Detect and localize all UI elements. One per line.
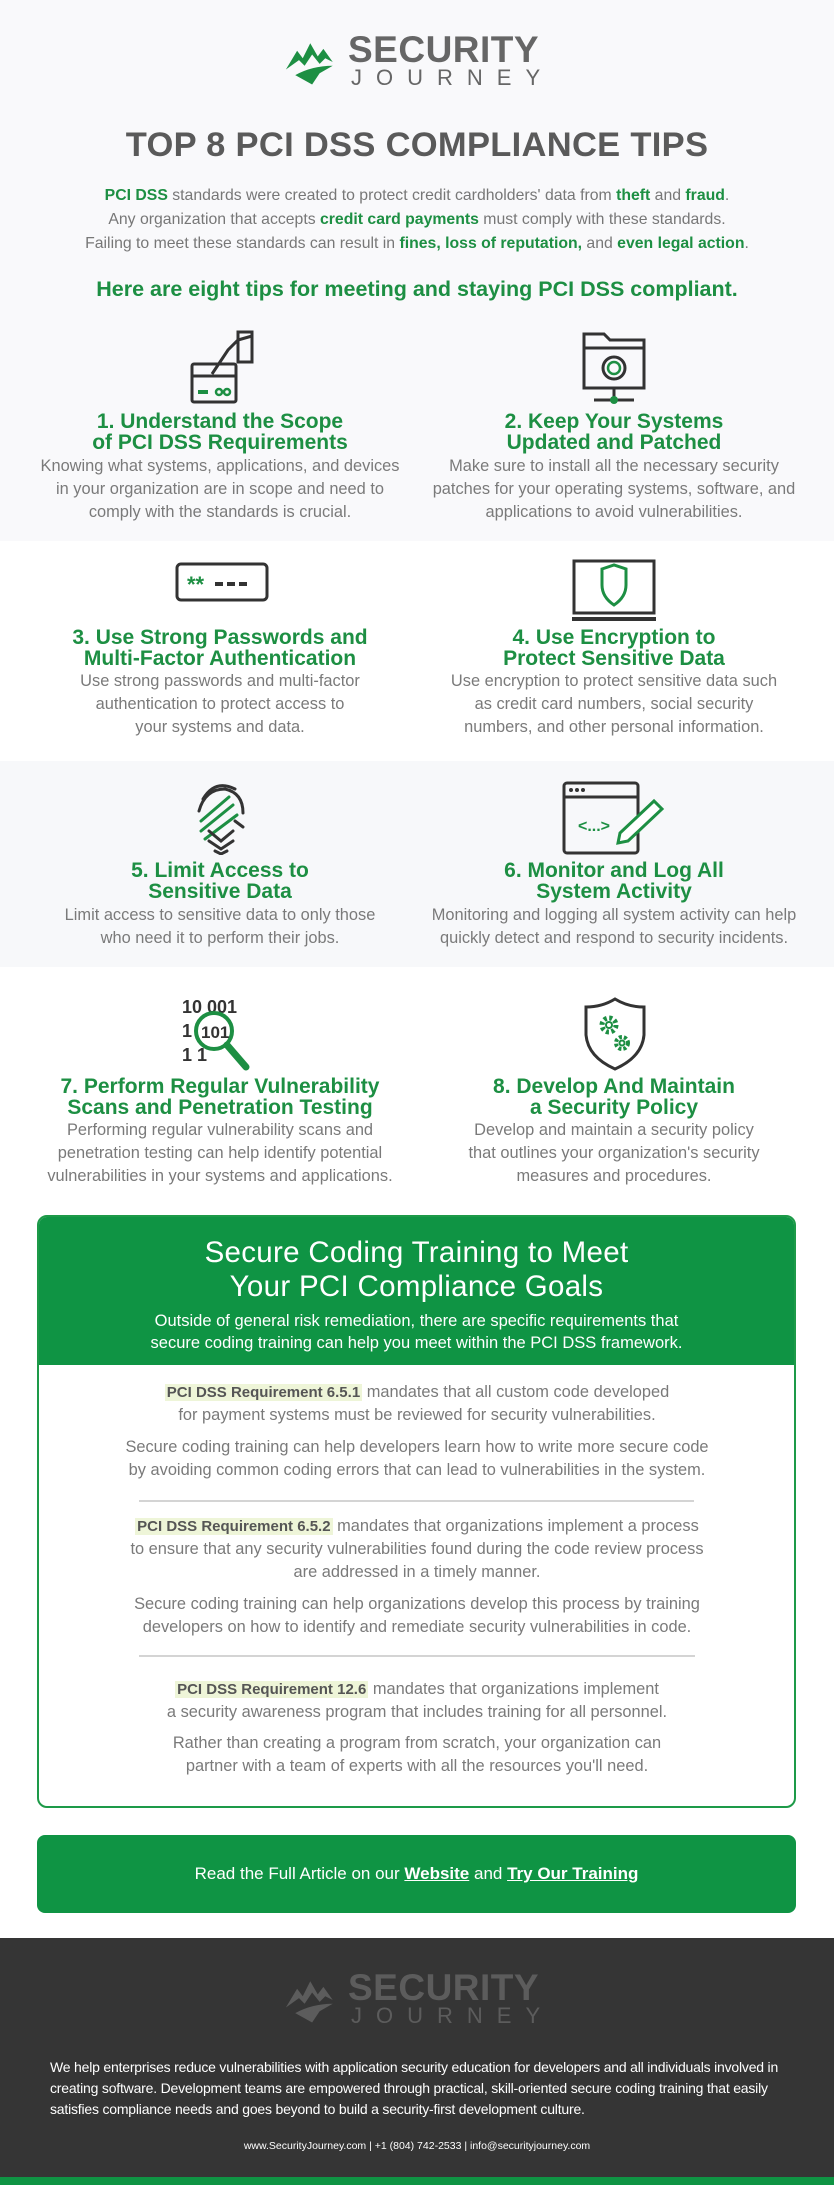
description: penetration testing can help identify potential xyxy=(58,1144,382,1162)
icon: laptop shield xyxy=(572,560,656,621)
heading xyxy=(503,626,725,670)
icon: binary magnifier: 1 0 xyxy=(182,1021,207,1041)
description: Monitoring and logging all system activity can help xyxy=(432,906,796,924)
description xyxy=(41,457,399,521)
footer logo: SECURITY xyxy=(348,1967,539,2008)
heading: 4. Use Encryption to xyxy=(512,626,716,649)
tip 4 xyxy=(451,560,777,736)
requirement 6.5.2: are addressed in a timely manner. xyxy=(294,1563,540,1581)
tip 5 xyxy=(65,784,375,947)
description: numbers, and other personal information. xyxy=(464,718,764,736)
icon: folder update xyxy=(582,332,646,404)
icon: password field: ** xyxy=(187,572,205,597)
text: partner with a team of experts with all the resources you'll need. xyxy=(186,1757,648,1775)
description: that outlines your organization's security xyxy=(468,1144,760,1162)
tip 8 xyxy=(468,997,760,1185)
icon: code window with pencil: <...> xyxy=(578,818,610,835)
description: Make sure to install all the necessary security xyxy=(449,457,779,475)
panel intro xyxy=(151,1312,682,1352)
intro text: Failing to meet these standards can result in fines, loss of reputation, and even legal action. xyxy=(85,235,749,252)
description xyxy=(47,1121,393,1185)
requirement 12.6: PCI DSS Requirement 12.6 mandates that organizations implement xyxy=(177,1680,659,1698)
footer xyxy=(0,1938,834,2185)
description: Use encryption to protect sensitive data such xyxy=(451,672,777,690)
heading xyxy=(505,410,723,454)
text: Secure coding training can help developers learn how to write more secure code xyxy=(125,1438,709,1456)
footer logo: JOURNEY xyxy=(351,2003,554,2028)
call to action button: Read the Full Article on our Website and Try Our Training xyxy=(195,1864,638,1883)
tip 1 xyxy=(41,330,399,521)
description xyxy=(468,1121,760,1185)
requirement 6.5.1: for payment systems must be reviewed for security vulnerabilities. xyxy=(178,1406,656,1424)
description: Performing regular vulnerability scans and xyxy=(67,1121,373,1139)
heading: Scans and Penetration Testing xyxy=(67,1096,373,1119)
footer text: We help enterprises reduce vulnerabilities with application security education for developers and all individuals involved in creating software. Development teams are empowered through practical, skill-oriented secure coding training that easily satisfies compliance needs and goes beyond to build a security-first development culture. xyxy=(50,2059,778,2117)
text: by avoiding common coding errors that can lead to vulnerabilities in the system. xyxy=(129,1461,705,1479)
heading: 2. Keep Your Systems xyxy=(505,410,723,433)
heading: 1. Understand the Scope xyxy=(97,410,343,433)
tip 7 xyxy=(47,997,393,1185)
description xyxy=(80,672,360,736)
title: TOP 8 PCI DSS COMPLIANCE TIPS xyxy=(126,126,708,164)
requirement 6.5.1 xyxy=(165,1383,669,1424)
description: Develop and maintain a security policy xyxy=(474,1121,754,1139)
heading: 6. Monitor and Log All xyxy=(504,859,724,882)
contact line: www.SecurityJourney.com | +1 (804) 742-2533 | info@securityjourney.com xyxy=(244,2140,590,2152)
description: in your organization are in scope and need to xyxy=(56,480,384,498)
text: Rather than creating a program from scratch, your organization can xyxy=(173,1734,661,1752)
panel heading: Secure Coding Training to Meet xyxy=(205,1236,628,1269)
tip 3 xyxy=(72,562,368,736)
logo xyxy=(286,29,554,90)
heading: Multi-Factor Authentication xyxy=(84,647,356,670)
description: Use strong passwords and multi-factor xyxy=(80,672,360,690)
heading: Protect Sensitive Data xyxy=(503,647,725,670)
panel intro: Outside of general risk remediation, there are specific requirements that xyxy=(155,1312,678,1330)
text: developers on how to identify and remediate security vulnerabilities in code. xyxy=(143,1618,691,1636)
panel intro: secure coding training can help you meet within the PCI DSS framework. xyxy=(151,1334,682,1352)
panel heading xyxy=(205,1236,628,1303)
description: vulnerabilities in your systems and applications. xyxy=(47,1167,393,1185)
icon: binary magnifier: 1 1 xyxy=(182,1045,207,1065)
logo: JOURNEY xyxy=(351,65,554,90)
icon: card hand xyxy=(190,330,254,404)
heading xyxy=(131,859,309,903)
requirement 12.6: a security awareness program that includes training for all personnel. xyxy=(167,1703,667,1721)
requirement 6.5.2: to ensure that any security vulnerabilities found during the code review process xyxy=(130,1540,704,1558)
icon: binary magnifier: 10 001 xyxy=(182,997,237,1017)
panel heading: Your PCI Compliance Goals xyxy=(230,1270,603,1303)
description xyxy=(451,672,777,736)
heading xyxy=(60,1075,380,1119)
heading: a Security Policy xyxy=(530,1096,698,1119)
intro text: Any organization that accepts credit card payments must comply with these standards. xyxy=(108,211,726,228)
icon: shield gears xyxy=(584,997,646,1071)
tip 6 xyxy=(432,782,796,947)
description: measures and procedures. xyxy=(516,1167,711,1185)
icon: code window with pencil xyxy=(562,782,664,854)
requirement 6.5.2 xyxy=(130,1517,704,1581)
requirement 6.5.2: PCI DSS Requirement 6.5.2 mandates that organizations implement a process xyxy=(137,1517,699,1535)
heading: 7. Perform Regular Vulnerability xyxy=(60,1075,379,1098)
description: quickly detect and respond to security incidents. xyxy=(440,929,788,947)
heading: Sensitive Data xyxy=(148,880,292,903)
description xyxy=(65,906,375,947)
panel header xyxy=(39,1217,794,1365)
heading xyxy=(504,859,724,903)
intro text: PCI DSS standards were created to protect credit cardholders' data from theft and fraud. xyxy=(105,187,729,204)
footer logo xyxy=(286,1967,554,2028)
heading: 3. Use Strong Passwords and xyxy=(72,626,368,649)
heading xyxy=(72,626,368,670)
heading: of PCI DSS Requirements xyxy=(92,431,348,454)
tip 2 xyxy=(433,332,795,521)
description xyxy=(432,906,796,947)
description: comply with the standards is crucial. xyxy=(89,503,351,521)
icon: binary magnifier xyxy=(182,997,250,1070)
description: your systems and data. xyxy=(135,718,305,736)
description xyxy=(433,457,795,521)
description: patches for your operating systems, software, and xyxy=(433,480,795,498)
description: as credit card numbers, social security xyxy=(475,695,753,713)
text: Secure coding training can help organizations develop this process by training xyxy=(134,1595,700,1613)
description: Limit access to sensitive data to only those xyxy=(65,906,375,924)
panel: secure coding training xyxy=(37,1215,796,1808)
requirement 6.5.1: PCI DSS Requirement 6.5.1 mandates that all custom code developed xyxy=(167,1383,669,1401)
description: authentication to protect access to xyxy=(96,695,344,713)
logo: SECURITY xyxy=(348,29,539,70)
heading xyxy=(92,410,348,454)
heading: System Activity xyxy=(536,880,692,903)
heading: 5. Limit Access to xyxy=(131,859,309,882)
description: applications to avoid vulnerabilities. xyxy=(486,503,742,521)
icon: password field xyxy=(176,562,268,602)
heading: Updated and Patched xyxy=(507,431,721,454)
requirement 12.6 xyxy=(167,1680,667,1721)
description: Knowing what systems, applications, and devices xyxy=(41,457,399,475)
subtitle: Here are eight tips for meeting and staying PCI DSS compliant. xyxy=(96,277,738,301)
icon: binary magnifier: 101 xyxy=(201,1023,229,1042)
call to action button xyxy=(37,1835,796,1913)
heading xyxy=(493,1075,735,1119)
icon: fingerprint xyxy=(198,784,245,855)
intro text xyxy=(85,187,749,252)
heading: 8. Develop And Maintain xyxy=(493,1075,735,1098)
description: who need it to perform their jobs. xyxy=(101,929,339,947)
